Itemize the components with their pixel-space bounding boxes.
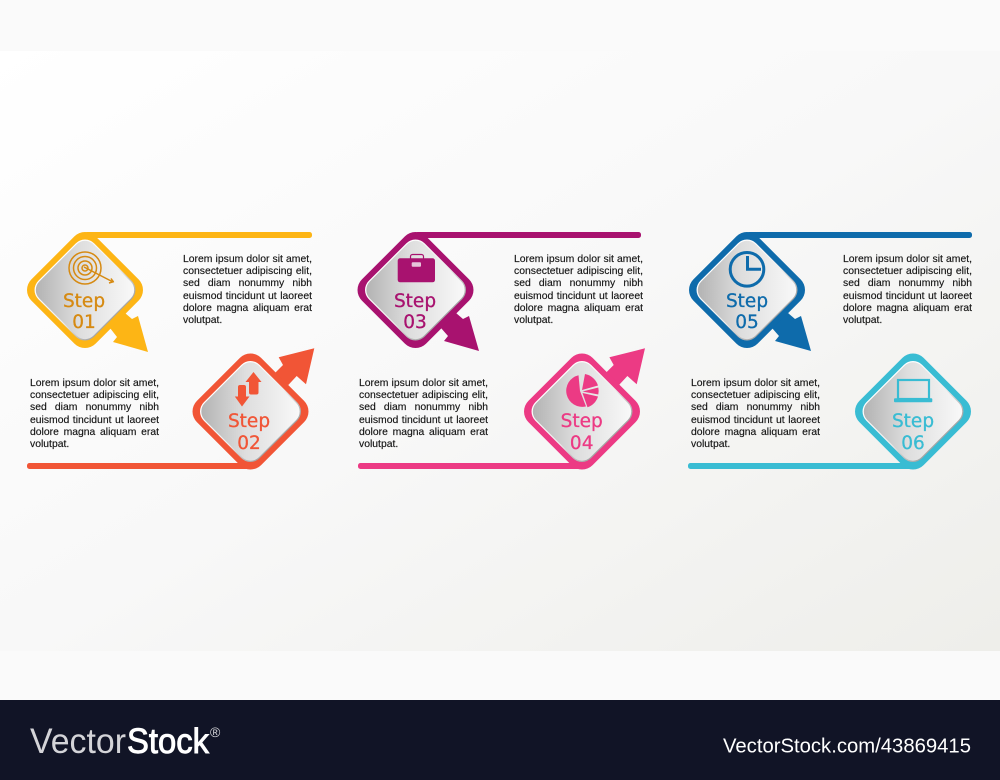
text block: step 03: consectetuer adipiscing elit, [514, 266, 643, 277]
arrow 03 [441, 313, 479, 351]
connector line 06 [688, 463, 913, 469]
text block: step 02: consectetuer adipiscing elit, [30, 390, 159, 401]
step 03 label: 03 [403, 312, 427, 333]
text block: step 06: euismod tincidunt ut laoreet [691, 415, 820, 426]
text block: step 03: euismod tincidunt ut laoreet [514, 291, 643, 302]
text block: step 01 [183, 254, 312, 326]
text block: step 01: dolore magna aliquam erat [183, 303, 312, 314]
footer logo: Vector [30, 722, 126, 761]
text block: step 05: euismod tincidunt ut laoreet [843, 291, 972, 302]
text block: step 06: sed diam nonummy nibh [691, 402, 820, 413]
step 04 label: 04 [570, 433, 593, 454]
connector line 03 [416, 232, 641, 238]
text block: step 02 [30, 378, 159, 450]
arrow 05 [772, 313, 811, 351]
text block: step 04: sed diam nonummy nibh [359, 402, 488, 413]
text block: step 04: dolore magna aliquam erat [359, 427, 488, 438]
text block: step 01: euismod tincidunt ut laoreet [183, 291, 312, 302]
connector line 04 [358, 463, 582, 469]
text block: step 05: Lorem ipsum dolor sit amet, [843, 254, 972, 265]
text block: step 01: sed diam nonummy nibh [183, 278, 312, 289]
footer logo: ® [210, 724, 221, 740]
step 01 label: 01 [72, 312, 96, 333]
diamond 01 [21, 226, 149, 354]
text block: step 01: Lorem ipsum dolor sit amet, [183, 254, 312, 265]
icon: laptop [894, 380, 932, 402]
text block: step 03: Lorem ipsum dolor sit amet, [514, 254, 643, 265]
arrow 04 [602, 348, 645, 385]
text block: step 05: consectetuer adipiscing elit, [843, 266, 972, 277]
text block: step 04: consectetuer adipiscing elit, [359, 390, 488, 401]
text block: step 04: Lorem ipsum dolor sit amet, [359, 378, 488, 389]
step 02 [27, 347, 315, 476]
diamond 05 [683, 226, 811, 354]
footer bar [0, 700, 1000, 780]
text block: step 06: Lorem ipsum dolor sit amet, [691, 378, 820, 389]
text block: step 06: volutpat. [691, 439, 730, 450]
text block: step 03 [514, 254, 643, 326]
text block: step 04 [359, 378, 488, 450]
text block: step 03: dolore magna aliquam erat [514, 303, 643, 314]
text block: step 02: sed diam nonummy nibh [30, 402, 159, 413]
text block: step 05: sed diam nonummy nibh [843, 278, 972, 289]
text block: step 01: consectetuer adipiscing elit, [183, 266, 312, 277]
text block: step 06 [691, 378, 820, 450]
connector line 05 [747, 232, 972, 238]
step 02 label: Step [228, 411, 270, 432]
connector line 01 [85, 232, 312, 238]
step 01 label: Step [63, 291, 105, 312]
step 04 label: Step [561, 411, 603, 432]
icon: pie chart [566, 374, 599, 407]
step 05 label: Step [726, 291, 768, 312]
text block: step 05: dolore magna aliquam erat [843, 303, 972, 314]
icon: up and down arrows [235, 372, 262, 406]
text block: step 06: consectetuer adipiscing elit, [691, 390, 820, 401]
footer image id: VectorStock.com/43869415 [723, 736, 971, 758]
text block: step 04: volutpat. [359, 439, 398, 450]
diamond 06 [849, 347, 977, 476]
text block: step 03: sed diam nonummy nibh [514, 278, 643, 289]
footer logo [30, 722, 221, 761]
text block: step 02: euismod tincidunt ut laoreet [30, 415, 159, 426]
step 01 [21, 226, 312, 354]
text block: step 02: dolore magna aliquam erat [30, 427, 159, 438]
text block: step 04: euismod tincidunt ut laoreet [359, 415, 488, 426]
icon: target [69, 252, 114, 284]
text block: step 05 [843, 254, 972, 326]
step 05 label: 05 [735, 312, 759, 333]
arrow 02 [272, 348, 314, 385]
step 05 [683, 226, 972, 354]
text block: step 01: volutpat. [183, 315, 222, 326]
icon: clock [730, 252, 764, 286]
step 06 label: 06 [901, 433, 925, 454]
step 04 [358, 347, 646, 476]
step 06 label: Step [892, 411, 934, 432]
step 02 label: 02 [237, 433, 261, 454]
diamond 02 [186, 347, 315, 476]
connector line 02 [27, 463, 251, 469]
background panel [0, 51, 1000, 651]
step 03 [351, 226, 641, 354]
arrow 01 [110, 313, 148, 352]
step 03 label: Step [394, 291, 436, 312]
text block: step 06: dolore magna aliquam erat [691, 427, 820, 438]
diamond 04 [518, 347, 646, 476]
text block: step 05: volutpat. [843, 315, 882, 326]
step 06 [688, 347, 977, 476]
text block: step 02: Lorem ipsum dolor sit amet, [30, 378, 159, 389]
icon: briefcase [398, 254, 435, 282]
footer logo: Stock [127, 722, 209, 761]
text block: step 03: volutpat. [514, 315, 553, 326]
text block: step 02: volutpat. [30, 439, 69, 450]
diamond 03 [351, 226, 480, 354]
